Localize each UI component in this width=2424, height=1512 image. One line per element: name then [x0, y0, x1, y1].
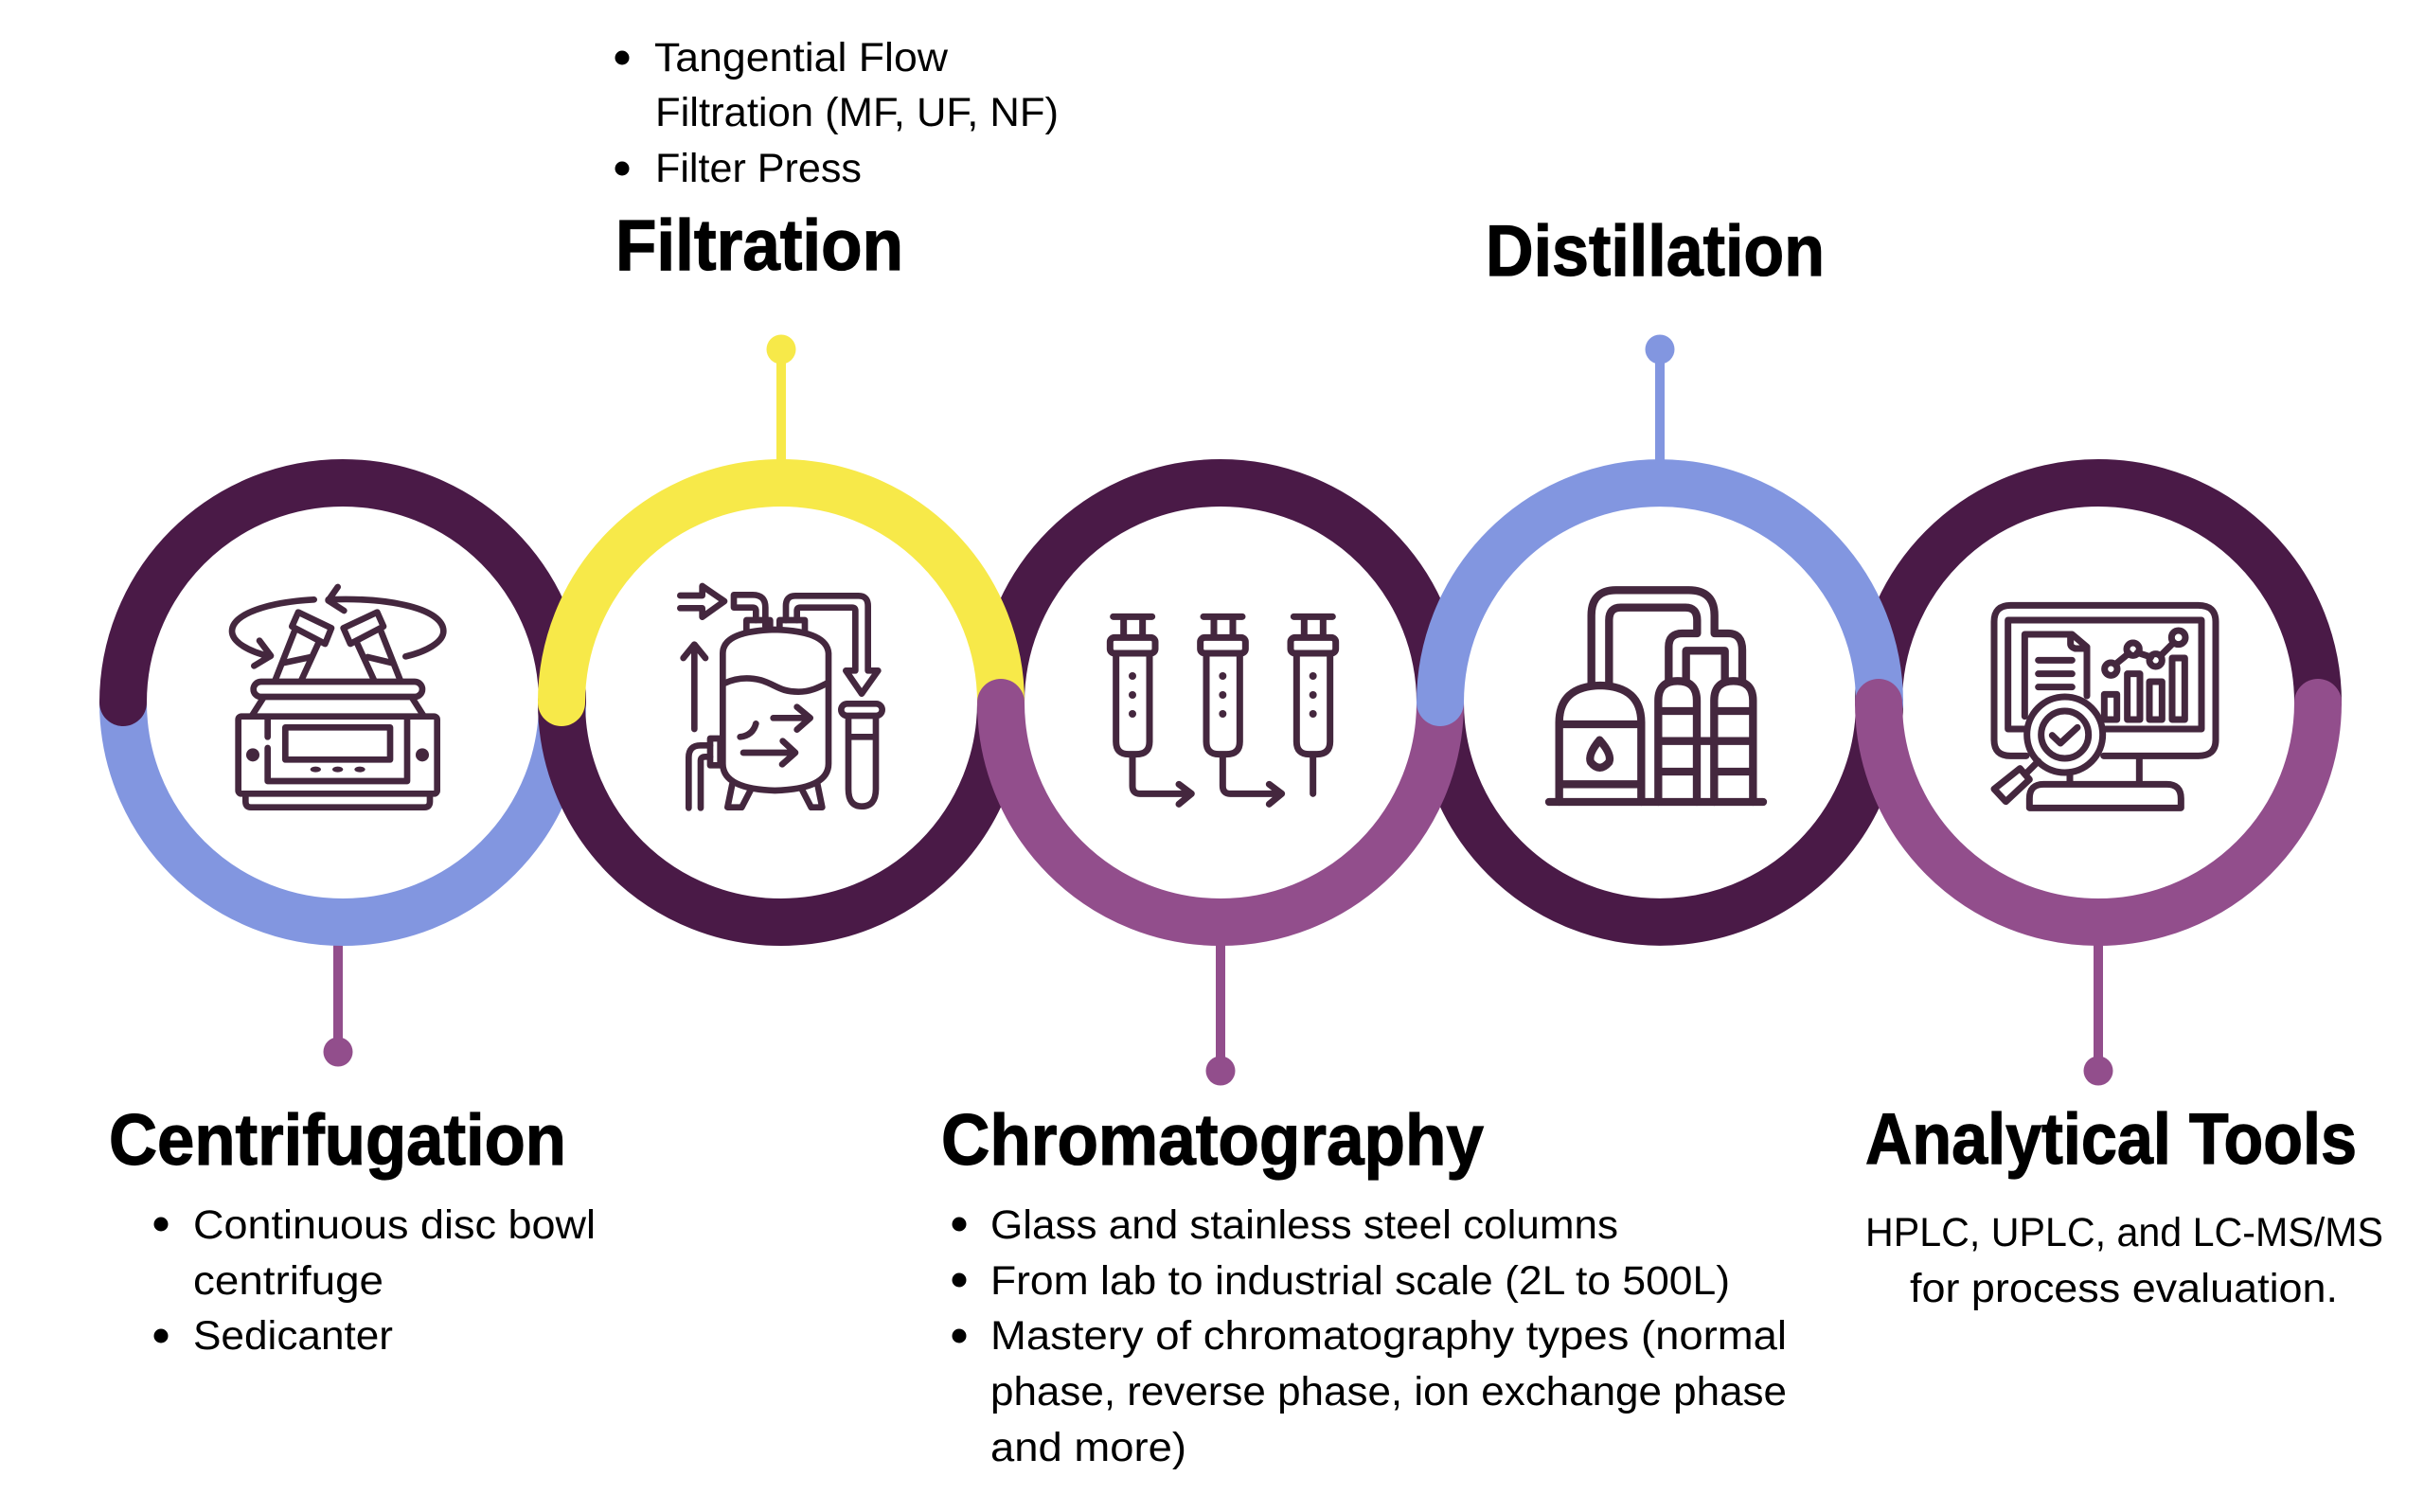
- ring arc: chromatography lower: [1001, 703, 1440, 922]
- text block: chromatography bullets: phase, reverse phase, ion exchange phase: [990, 1369, 1787, 1414]
- connector: analytical tools: [2083, 937, 2113, 1085]
- icon: centrifuge: [232, 587, 443, 808]
- ring arc: filtration lower: [561, 703, 1001, 922]
- text block: chromatography bullets: From lab to industrial scale (2L to 500L): [990, 1258, 1730, 1304]
- connector: centrifugation: [324, 937, 352, 1066]
- text block: filtration bullets: Tangential Flow: [654, 35, 949, 80]
- text block: chromatography bullets: Glass and stainless steel columns: [990, 1202, 1618, 1248]
- text block: filtration bullets: [615, 35, 1059, 191]
- connector: distillation: [1646, 335, 1674, 467]
- icon: bioreactor with filtration flow: [680, 586, 882, 808]
- ring arc: filtration upper: [561, 483, 1001, 703]
- text block: filtration bullets: Filter Press: [655, 146, 862, 191]
- ring arc: centrifugation upper: [123, 483, 562, 703]
- ring arc: distillation upper: [1440, 483, 1880, 703]
- heading: analytical tools: Analytical Tools: [1865, 1099, 2357, 1180]
- heading: centrifugation: Centrifugation: [109, 1100, 566, 1181]
- text block: analytical tools description: for process evaluation.: [1910, 1266, 2338, 1311]
- text block: analytical tools description: HPLC, UPLC, and LC-MS/MS: [1865, 1210, 2383, 1255]
- text block: centrifugation bullets: Continuous disc bowl: [193, 1202, 596, 1248]
- ring arc: analytical tools lower: [1879, 703, 2318, 922]
- text block: filtration bullets: Filtration (MF, UF, NF): [655, 90, 1059, 135]
- connector: chromatography: [1206, 937, 1235, 1085]
- icon: monitor with charts and magnifier: [1994, 605, 2216, 808]
- text block: chromatography bullets: [953, 1202, 1787, 1470]
- text block: centrifugation bullets: Sedicanter: [193, 1313, 393, 1359]
- icon: distillation plant: [1549, 590, 1763, 802]
- ring arc: chromatography upper: [1001, 483, 1440, 703]
- text block: centrifugation bullets: [153, 1202, 596, 1359]
- text block: analytical tools description: [1865, 1210, 2383, 1311]
- heading: distillation: Distillation: [1486, 211, 1825, 292]
- ring arc: distillation lower: [1440, 703, 1880, 922]
- heading: filtration: Filtration: [615, 205, 903, 286]
- connector: filtration: [767, 335, 795, 467]
- icon: chromatography columns: [1110, 616, 1336, 804]
- text block: centrifugation bullets: centrifuge: [193, 1258, 383, 1304]
- heading: chromatography: Chromatography: [941, 1100, 1484, 1181]
- text block: chromatography bullets: and more): [990, 1425, 1186, 1470]
- text block: chromatography bullets: Mastery of chromatography types (normal: [990, 1313, 1787, 1359]
- ring arc: centrifugation lower: [123, 703, 562, 922]
- ring arc: analytical tools upper: [1879, 483, 2318, 703]
